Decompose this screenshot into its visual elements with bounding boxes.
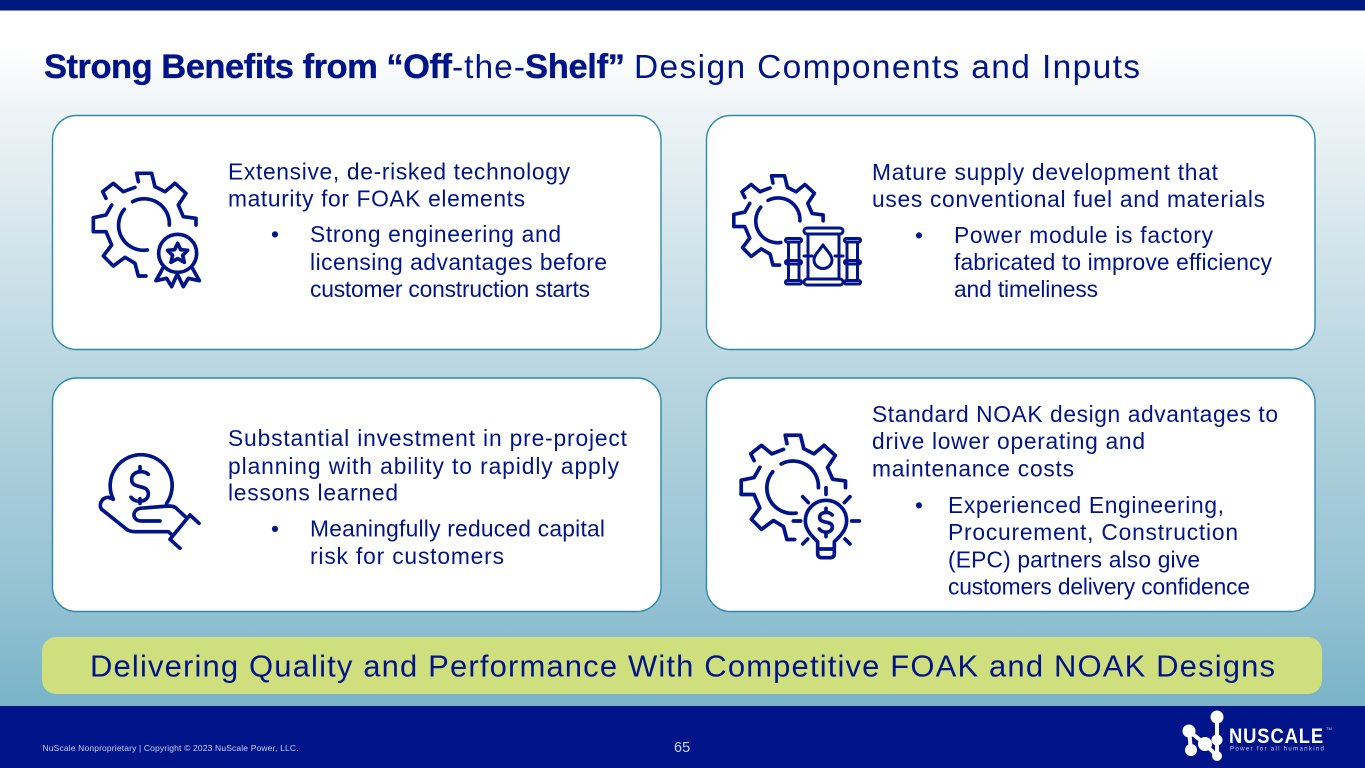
text: technology maturity: maturity for FOAK elements	[228, 186, 525, 212]
text: supply development	[872, 159, 1273, 302]
text: standard NOAK design: drive lower operating and	[872, 428, 1145, 454]
text: standard NOAK design: Experienced Engineering,	[948, 492, 1224, 518]
callout banner: Delivering Quality and Performance With Competitive FOAK and NOAK Designs	[90, 648, 1275, 684]
text: supply development: Mature supply development that	[872, 159, 1219, 185]
text: standard NOAK design	[872, 401, 1278, 600]
text: standard NOAK design: customers delivery confidence	[948, 574, 1250, 600]
panel: standard NOAK design	[706, 378, 1315, 612]
logo mark	[1182, 710, 1224, 761]
logo trademark: TM	[1326, 726, 1332, 731]
text: technology maturity: licensing advantages before	[310, 249, 607, 275]
title: Strong Benefits from “Off	[44, 48, 452, 86]
page number: 65	[674, 740, 690, 756]
text: supply development: •	[915, 222, 923, 248]
text: pre-project planning: lessons learned	[228, 480, 398, 506]
panel: technology maturity	[52, 116, 661, 350]
text: standard NOAK design: Standard NOAK design advantages to	[872, 401, 1278, 427]
text: standard NOAK design: •	[915, 492, 923, 518]
title: Shelf”	[525, 48, 625, 86]
text: pre-project planning: Meaningfully reduced capital	[310, 516, 605, 542]
text: pre-project planning: Substantial investment in pre-project	[228, 425, 628, 451]
text: pre-project planning: •	[271, 516, 279, 542]
icon: gear with light bulb	[741, 435, 859, 558]
text: technology maturity: Strong engineering and	[310, 221, 561, 247]
footer copyright: NuScale Nonproprietary | Copyright © 2023 NuScale Power, LLC.	[42, 743, 298, 753]
text: standard NOAK design: (EPC) partners also give	[948, 546, 1200, 572]
text: technology maturity: Extensive, de-risked technology	[228, 158, 571, 184]
top bar	[0, 0, 1365, 10]
title: Design Components and Inputs	[634, 49, 1140, 86]
text: pre-project planning: risk for customers	[310, 543, 504, 569]
text: standard NOAK design: maintenance costs	[872, 456, 1074, 482]
text: supply development: Power module is factory	[954, 222, 1214, 248]
text: technology maturity: •	[271, 221, 279, 247]
logo tagline: Power for all humankind	[1230, 746, 1325, 752]
text: technology maturity: customer construction starts	[310, 276, 590, 302]
icon: gear with award ribbon	[93, 173, 199, 287]
panel: supply development	[706, 116, 1315, 350]
logo: NuScale	[1182, 710, 1332, 761]
icon: hand holding coin	[100, 455, 199, 548]
logo wordmark: NUSCALE	[1229, 725, 1324, 748]
text: standard NOAK design: Procurement, Construction	[948, 519, 1238, 545]
text: supply development: uses conventional fuel and materials	[872, 186, 1265, 212]
text: technology maturity	[228, 158, 607, 302]
text: supply development: fabricated to improve efficiency	[954, 249, 1273, 275]
footer bar	[0, 706, 1365, 768]
callout banner	[42, 637, 1322, 694]
text: pre-project planning	[228, 425, 628, 569]
text: pre-project planning: planning with ability to rapidly apply	[228, 453, 620, 479]
panel: pre-project planning	[52, 378, 661, 612]
icon: gear with oil barrels	[734, 176, 860, 285]
text: supply development: and timeliness	[954, 276, 1098, 302]
title: -the-	[452, 49, 525, 86]
